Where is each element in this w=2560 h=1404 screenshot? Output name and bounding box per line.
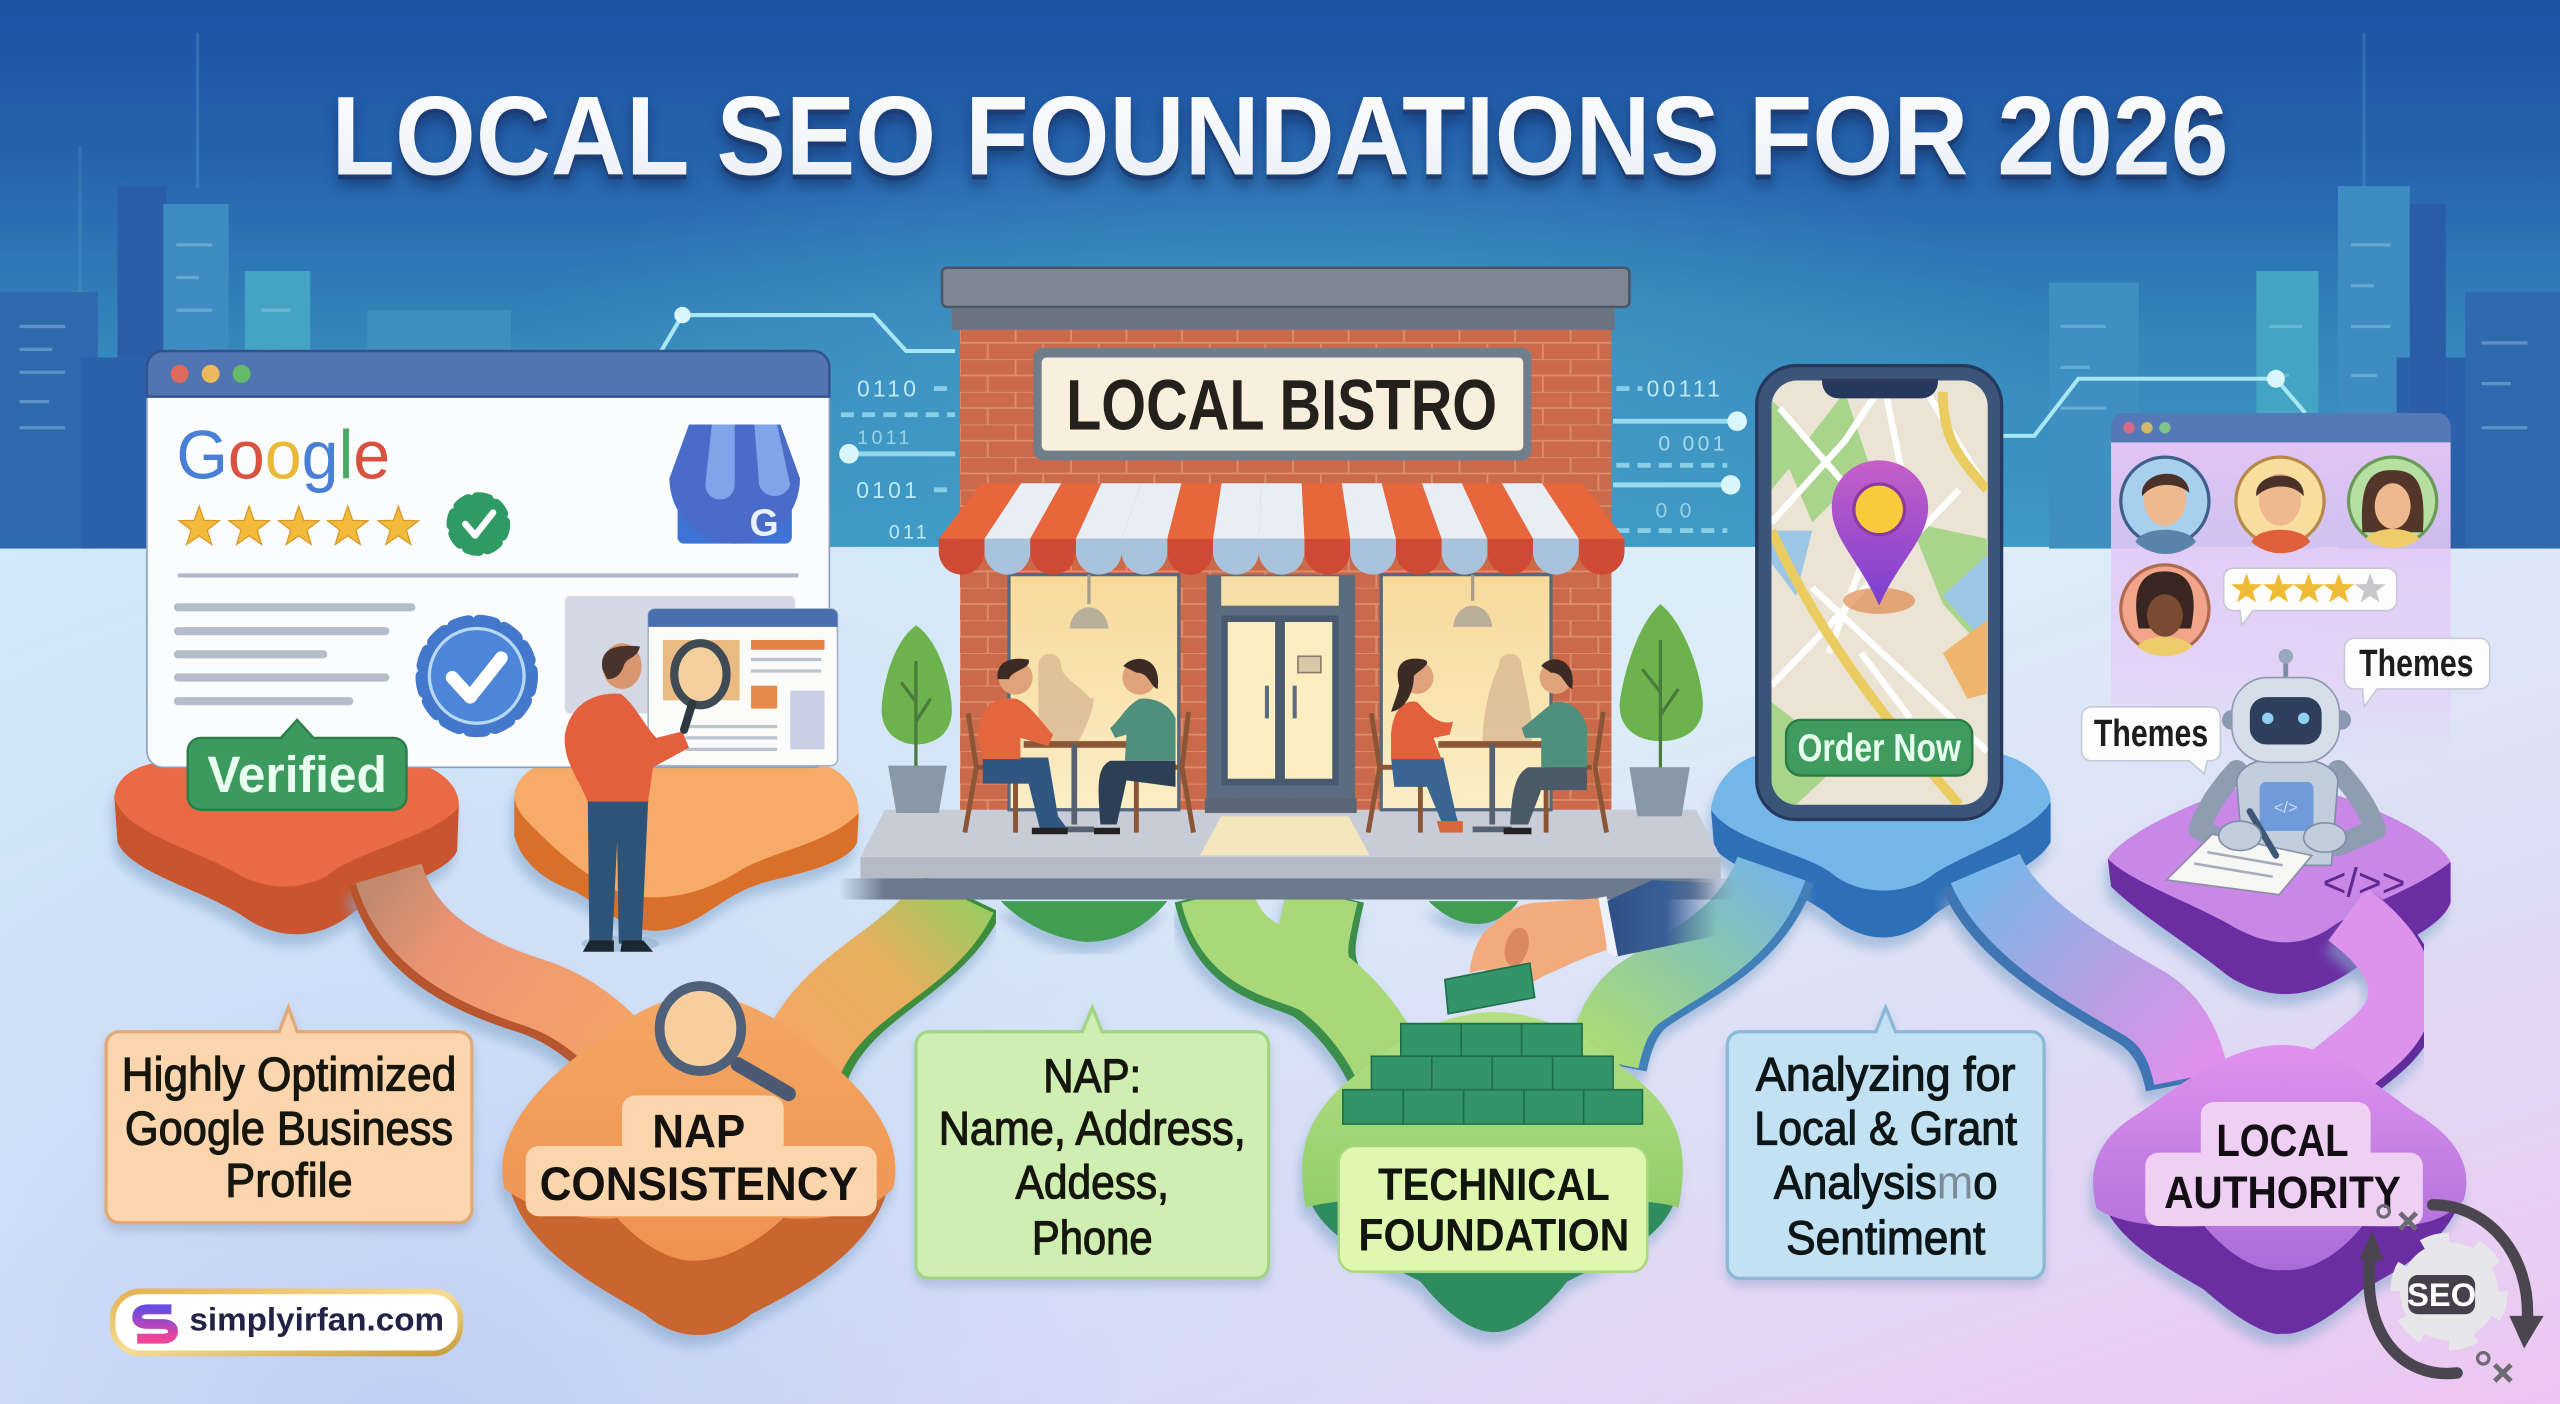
- door: [1205, 575, 1357, 813]
- left potted tree: [882, 625, 952, 813]
- NAP consistency label: NAP: [652, 1106, 745, 1159]
- technical foundation label: TECHNICAL: [1378, 1159, 1610, 1210]
- browser toolbar: [147, 351, 829, 397]
- left window: [1009, 575, 1179, 810]
- circuit lines right: 0 0: [1655, 500, 1695, 523]
- callout: Google Business Profile: Highly Optimized: [122, 1049, 456, 1102]
- simplyirfan logo pill: [113, 1291, 460, 1353]
- callout: sentiment analysis: Local & Grant: [1754, 1102, 2017, 1155]
- phone with map: [1757, 366, 2002, 820]
- callout: NAP details: NAP:: [1043, 1050, 1141, 1103]
- platform: NAP consistency: [502, 993, 895, 1335]
- green connector blobs: [1001, 901, 1518, 942]
- hand placing green brick: [1469, 880, 1718, 990]
- callout: NAP details: Name, Address,: [939, 1102, 1246, 1155]
- callout: sentiment analysis: Sentiment: [1786, 1212, 1985, 1265]
- platform: technical foundation: [1302, 1012, 1683, 1332]
- callout: sentiment analysis: [1727, 1007, 2044, 1278]
- code symbol: </>>: [2323, 859, 2405, 905]
- background ground: [0, 547, 2560, 1404]
- sidewalk: [839, 810, 1734, 900]
- local authority label: AUTHORITY: [2164, 1167, 2401, 1218]
- order now button: [1786, 720, 1972, 775]
- ribbon: purple loop: [2327, 914, 2408, 1086]
- circuit lines left: 1011: [857, 427, 912, 449]
- avatar 4: [2121, 565, 2209, 656]
- callout: sentiment analysis: Analyzing for: [1756, 1049, 2016, 1102]
- storefront: Local Bistro: [839, 268, 1734, 900]
- robot: </>: [2274, 799, 2298, 817]
- left diners: [965, 659, 1193, 834]
- callout: Google Business Profile: Google Business: [125, 1102, 453, 1155]
- five star rating: [179, 506, 419, 544]
- image placeholder: [565, 596, 795, 713]
- title: LOCAL SEO FOUNDATIONS FOR 2026: [331, 73, 2229, 199]
- platform: blue map: [1711, 753, 2051, 938]
- rating bubble: [2224, 568, 2397, 625]
- striped awning: [939, 483, 1624, 575]
- city skyline left: [0, 33, 511, 549]
- brick wall: [960, 328, 1611, 810]
- right window: [1381, 575, 1551, 810]
- review browser panel: [2082, 413, 2490, 905]
- roof cornice: [942, 268, 1629, 330]
- NAP consistency label: CONSISTENCY: [540, 1158, 858, 1211]
- ribbon: green to blue: [1603, 869, 1780, 1064]
- circuit lines right: 0 001: [1658, 433, 1728, 456]
- verified tag: Verified: [207, 746, 387, 803]
- magnifier icon: [660, 986, 789, 1094]
- store sign: [1033, 348, 1531, 460]
- callout: sentiment analysis: Analysismo: [1774, 1156, 1998, 1209]
- local authority label: LOCAL: [2216, 1115, 2349, 1166]
- callout: NAP details: Phone: [1032, 1212, 1153, 1265]
- business profile store icon: G: [749, 501, 779, 543]
- blue verified badge: [423, 622, 531, 730]
- ribbon: green arms to technical foundation: [1210, 895, 1388, 1068]
- themes bubble right: Themes: [2359, 642, 2473, 684]
- Google logo: Google: [176, 416, 390, 493]
- callout: NAP details: Addess,: [1016, 1156, 1169, 1209]
- paper and pen: [2167, 811, 2346, 895]
- themes bubble left: Themes: [2094, 712, 2208, 754]
- phone notch: [1822, 379, 1938, 398]
- platform: purple reviews: [2108, 783, 2451, 994]
- themes bubble right: [2344, 638, 2490, 707]
- callout: Google Business Profile: [106, 1007, 472, 1223]
- review browser toolbar: [2111, 413, 2451, 442]
- circuit lines left: 011: [889, 522, 930, 544]
- avatar 2: [2236, 457, 2324, 553]
- review browser dots: [2123, 422, 2171, 433]
- circuit lines left: 0101: [856, 477, 920, 503]
- order now button: Order Now: [1798, 727, 1961, 770]
- callout: Google Business Profile: Profile: [225, 1155, 353, 1208]
- platform: orange search: [514, 761, 859, 931]
- green verified seal: [452, 498, 504, 550]
- avatar 1: [2121, 457, 2209, 554]
- right diners: [1368, 659, 1607, 834]
- window dots: [171, 365, 251, 383]
- SEO gear badge: [2359, 1205, 2544, 1381]
- themes bubble left: [2082, 707, 2220, 774]
- avatar 3: [2349, 457, 2437, 548]
- circuit lines right: 00111: [1647, 376, 1723, 402]
- browser: Google Business Profile: [147, 351, 829, 767]
- circuit lines left: 0110: [857, 376, 919, 402]
- circuit lines left: [661, 307, 955, 544]
- ribbon: orange to green: [800, 895, 963, 1064]
- map pin: [1832, 460, 1928, 614]
- simplyirfan logo pill: simplyirfan.com: [189, 1301, 444, 1338]
- right potted tree: [1620, 604, 1703, 816]
- verified tag: [188, 720, 407, 810]
- robot: [2199, 649, 2376, 865]
- platform: red GBP: [114, 761, 459, 934]
- person with magnifier: [565, 643, 727, 952]
- platform: local authority: [2093, 1045, 2466, 1334]
- technical foundation label: FOUNDATION: [1358, 1210, 1629, 1261]
- SEO gear badge: SEO: [2407, 1276, 2476, 1313]
- foundation bricks: [1343, 963, 1642, 1124]
- technical foundation label: [1339, 1146, 1647, 1272]
- business profile store icon: [669, 424, 800, 544]
- callout: NAP details: [916, 1007, 1269, 1278]
- ribbon: red to NAP: [382, 873, 629, 1068]
- mini search result page: [648, 609, 838, 766]
- background sky band: [0, 0, 2560, 549]
- NAP consistency label: [526, 1095, 877, 1216]
- map screen: [1771, 380, 1989, 805]
- local authority label: [2145, 1102, 2423, 1226]
- city skyline right: [2049, 33, 2560, 549]
- ribbon: blue to purple: [1977, 869, 2191, 1084]
- circuit lines right: [1613, 370, 2305, 531]
- profile content lines: [178, 574, 798, 577]
- store sign: LOCAL BISTRO: [1066, 365, 1497, 445]
